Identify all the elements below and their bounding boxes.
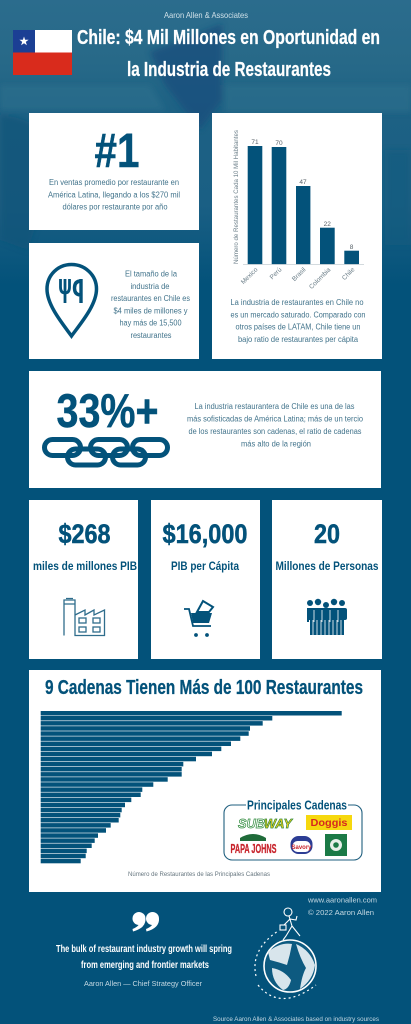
description: es un mercado saturado. Comparado con	[230, 310, 366, 320]
value labels: 47	[299, 179, 307, 186]
icon: group of people	[307, 599, 347, 635]
description: dólares por restaurante por año	[62, 202, 168, 212]
description: bajo ratio de restaurantes per cápita	[238, 335, 359, 344]
description: más sofisticadas de América Latina; más de un tercio	[187, 414, 364, 424]
panel: market size	[29, 243, 199, 359]
description: industria de	[130, 282, 170, 291]
logo: Subway	[238, 816, 293, 831]
icon: Chile flag	[13, 30, 72, 75]
panel: population	[272, 500, 382, 659]
icon: quote marks	[132, 912, 159, 932]
quote attribution: Aaron Allen — Chief Strategy Officer	[84, 979, 202, 988]
title: la Industria de Restaurantes	[127, 59, 331, 81]
stat label: miles de millones PIB	[33, 559, 137, 573]
stat label: Millones de Personas	[276, 559, 379, 573]
stat: $268: $268	[58, 519, 110, 549]
panel: GDP	[29, 500, 138, 659]
panel: #1 in sales	[29, 113, 199, 230]
description: hay más de 15,500	[120, 318, 182, 328]
bars	[248, 146, 359, 264]
category labels: Perú	[269, 266, 284, 281]
website and copyright	[307, 896, 377, 917]
horizontal bar chart	[41, 711, 342, 863]
description	[111, 270, 190, 340]
stat label: PIB per Cápita	[171, 559, 239, 573]
quote	[56, 944, 232, 971]
callout heading: Principales Cadenas	[247, 798, 347, 812]
header brand label: Aaron Allen & Associates	[164, 10, 248, 20]
description: restaurantes	[130, 331, 172, 340]
description: $4 miles de millones y	[114, 306, 188, 316]
description: otros países de LATAM, Chile tiene un	[236, 322, 360, 332]
title	[77, 27, 380, 81]
header photo background	[0, 0, 411, 285]
description: América Latina, llegando a los $270 mil	[48, 190, 180, 200]
logo: Doggis: Doggis	[310, 818, 348, 829]
chart caption: Número de Restaurantes de las Principales Cadenas	[128, 871, 271, 878]
description: En ventas promedio por restaurante en	[49, 178, 179, 187]
icon: globe with walking figure	[255, 908, 316, 998]
value labels: 70	[275, 140, 283, 147]
icon: chain	[44, 440, 168, 465]
stat: 20: 20	[314, 519, 340, 549]
description: de los restaurantes son cadenas, el ratio de cadenas	[188, 427, 362, 436]
logo: Subway: SUB	[238, 816, 265, 831]
description	[187, 402, 364, 448]
stat: $16,000: $16,000	[162, 519, 248, 549]
description: más alto de la región	[241, 440, 311, 448]
description	[230, 298, 366, 344]
description: El tamaño de la	[125, 270, 178, 278]
description: restaurantes en Chile es	[111, 294, 190, 303]
value labels: 22	[324, 221, 331, 228]
panel: GDP per capita	[151, 500, 260, 659]
icon: shopping cart	[184, 601, 213, 637]
quote: The bulk of restaurant industry growth will spring	[56, 944, 232, 955]
logo: Subway: WAY	[264, 816, 293, 831]
description: La industria de restaurantes en Chile no	[230, 298, 364, 307]
value labels: 71	[251, 139, 259, 146]
value labels	[251, 139, 354, 251]
quote: from emerging and frontier markets	[81, 960, 209, 971]
panel: restaurants per capita chart	[212, 113, 382, 359]
bar chart	[233, 129, 364, 291]
big stat: #1: #1	[94, 125, 140, 178]
logo: Papa Johns: PAPA JOHNS	[230, 841, 277, 856]
category labels: Colombia	[308, 266, 333, 291]
logo: Savory: Savory	[291, 845, 312, 851]
icon: factory	[64, 598, 104, 636]
category labels	[240, 266, 357, 291]
value labels: 8	[350, 244, 354, 251]
y axis title: Número de Restaurantes Cada 10 Mil Habitantes	[233, 129, 240, 264]
logo: Starbucks	[325, 834, 347, 856]
website and copyright: www.aaronallen.com	[307, 896, 377, 904]
category labels: Mexico	[240, 266, 260, 286]
description: La industria restaurantera de Chile es una de las	[194, 402, 354, 411]
description	[48, 178, 180, 212]
big stat: 33%+: 33%+	[56, 384, 158, 437]
category labels: Chile	[341, 266, 357, 282]
category labels: Brasil	[291, 266, 308, 283]
callout: top chains	[224, 798, 362, 860]
icon: restaurant location pin	[47, 264, 96, 336]
website and copyright: © 2022 Aaron Allen	[308, 908, 374, 917]
panel: 33% chains	[29, 371, 381, 488]
source note: Source Aaron Allen & Associates based on industry sources	[213, 1016, 380, 1023]
panel: chains	[29, 670, 381, 892]
